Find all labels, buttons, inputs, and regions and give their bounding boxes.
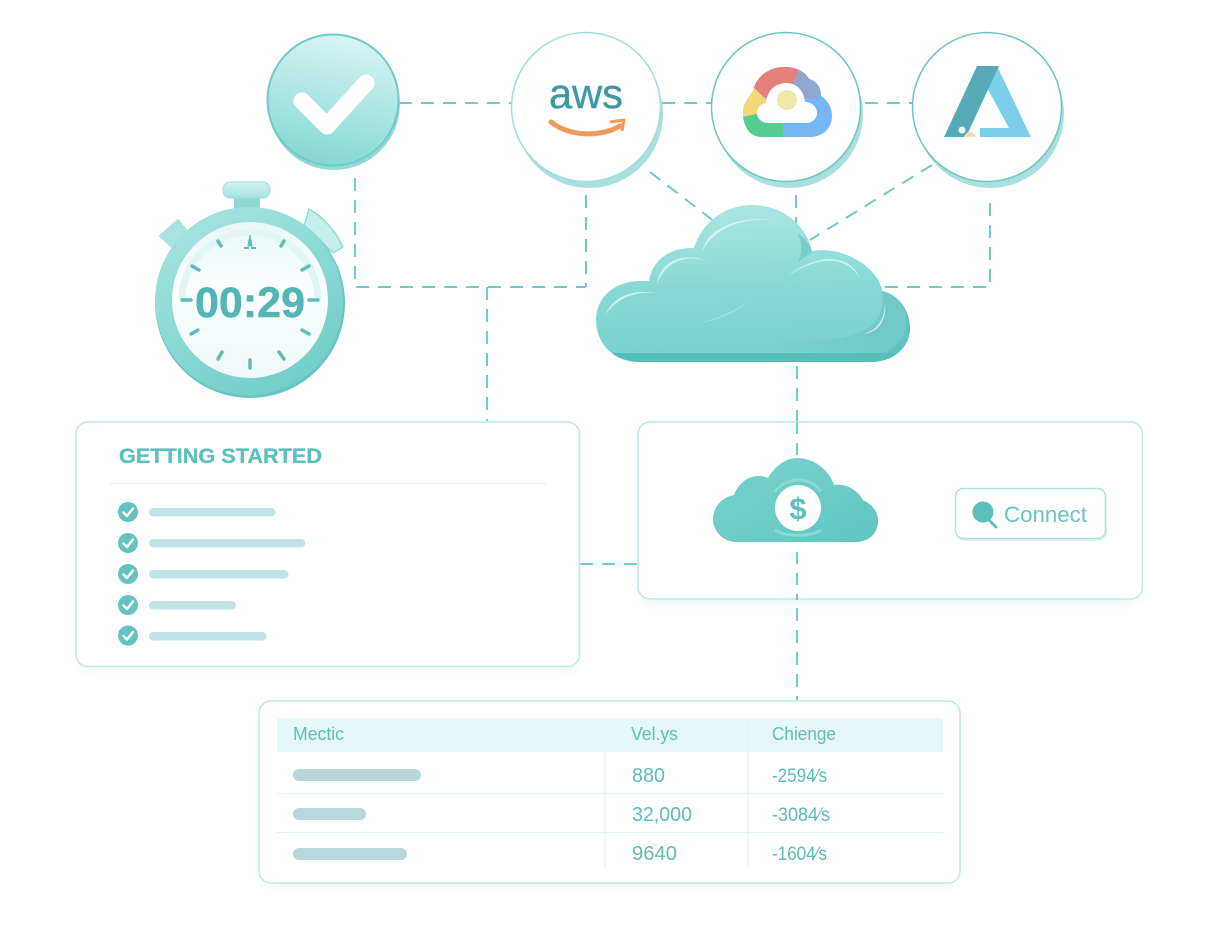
icon: stopwatch (155, 182, 345, 398)
table header: Vel.ys (631, 724, 678, 744)
icon: search (972, 502, 996, 527)
icon: large cloud (590, 205, 920, 366)
table row 2 (293, 804, 830, 826)
table row 1: -2594⁄s (772, 766, 827, 787)
table header: Mectic (293, 724, 344, 744)
stopwatch crown (223, 182, 270, 214)
stopwatch tick marks (182, 235, 318, 368)
table row 1: 880 (632, 765, 665, 787)
panel: getting started (76, 422, 580, 670)
stopwatch side buttons (160, 209, 343, 253)
table row 2: 32,000 (632, 804, 692, 826)
icon: triangle logo circle (912, 32, 1064, 188)
heading: GETTING STARTED (119, 445, 322, 468)
table header (277, 718, 943, 752)
button: connect: Connect (1004, 502, 1087, 527)
cloud highlights (606, 219, 885, 334)
checklist (118, 502, 306, 646)
icon: check badge (268, 34, 400, 170)
icon: AWS logo circle (512, 32, 663, 188)
table row 1 (293, 765, 827, 787)
button: connect (956, 488, 1107, 541)
icon: Google Cloud logo circle (712, 32, 863, 188)
icon: dollar cloud: $ (789, 491, 807, 526)
icon: dollar cloud (713, 458, 878, 542)
table row 2: -3084⁄s (772, 805, 830, 826)
table row 3 (293, 843, 827, 865)
table header: Chienge (772, 724, 836, 744)
panel: connect (638, 422, 1142, 603)
panel: metrics table (259, 701, 960, 885)
table row 3: 9640 (632, 843, 677, 865)
icon: AWS logo circle: aws (549, 70, 623, 117)
table row 3: -1604⁄s (772, 844, 827, 865)
stopwatch time: 00:29 (195, 279, 305, 327)
connector lines (355, 103, 990, 701)
